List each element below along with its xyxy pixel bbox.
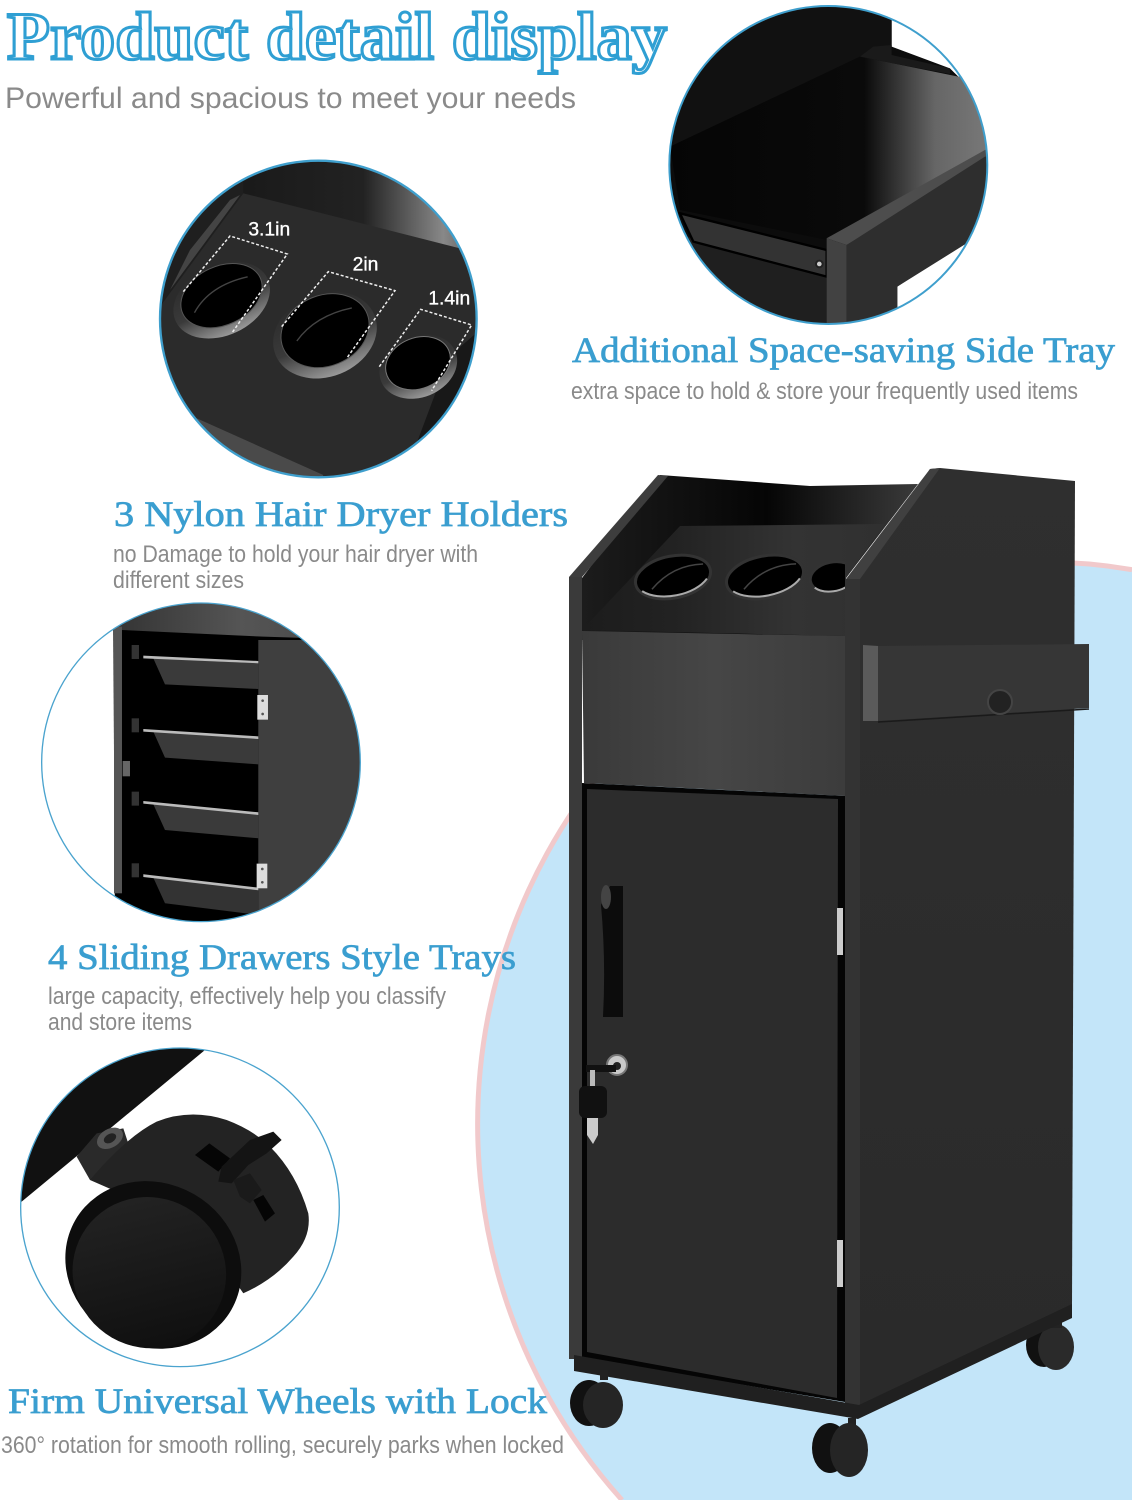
heading: wheels: Firm Universal Wheels with Lock bbox=[8, 1381, 547, 1421]
front left wheel bbox=[570, 1370, 623, 1428]
tray 4 bbox=[132, 863, 258, 915]
holder openings bbox=[634, 554, 845, 600]
cabinet bbox=[569, 468, 1089, 1477]
tray 2 bbox=[132, 718, 258, 764]
heading: side tray: Additional Space-saving Side Tray bbox=[572, 330, 1115, 370]
description: dryer holders: different sizes bbox=[113, 567, 244, 594]
wheel bbox=[65, 1181, 242, 1349]
caster body bbox=[90, 1115, 309, 1293]
door handle bbox=[601, 885, 623, 1017]
door bbox=[587, 789, 838, 1398]
description: dryer holders: no Damage to hold your hair dryer with bbox=[113, 541, 478, 568]
drawer front bbox=[582, 631, 845, 796]
icon: holder ring 3.1in bbox=[174, 263, 270, 338]
hinges bbox=[837, 908, 843, 1287]
right side panel bbox=[858, 468, 1075, 1408]
heading: drawers: 4 Sliding Drawers Style Trays bbox=[48, 937, 516, 977]
description: drawers: large capacity, effectively help you classify bbox=[48, 983, 446, 1010]
brake lever bbox=[218, 1132, 282, 1203]
heading: dryer holders: 3 Nylon Hair Dryer Holders bbox=[114, 494, 568, 534]
tray 1 bbox=[132, 645, 258, 689]
dimension labels: 3.1in bbox=[248, 219, 290, 240]
title: Product detail display bbox=[7, 0, 667, 74]
hinges bbox=[257, 695, 268, 888]
description: dryer holders bbox=[113, 541, 478, 594]
tray 3 bbox=[132, 792, 258, 838]
top interior back wall bbox=[582, 475, 918, 640]
back wheel bbox=[1026, 1318, 1074, 1370]
dimension guides bbox=[183, 236, 472, 391]
right post bbox=[845, 579, 860, 1405]
description: drawers bbox=[48, 983, 446, 1036]
description: wheels: 360° rotation for smooth rolling, securely parks when locked bbox=[1, 1432, 564, 1459]
left post bbox=[569, 577, 582, 1359]
panel: caster wheel close-up bbox=[20, 1047, 340, 1368]
description: side tray: extra space to hold & store your frequently used items bbox=[571, 378, 1078, 405]
front middle wheel bbox=[812, 1418, 868, 1477]
background blue circle bbox=[478, 562, 1132, 1500]
dimension labels: 1.4in bbox=[428, 288, 470, 309]
panel: drawer trays close-up bbox=[41, 602, 361, 922]
door lock and key bbox=[579, 1055, 627, 1144]
dimension labels bbox=[248, 219, 470, 309]
subtitle: Powerful and spacious to meet your needs bbox=[5, 82, 576, 115]
side tray bbox=[863, 644, 1089, 722]
icon: holder ring 1.4in bbox=[380, 336, 458, 399]
left slanted edge bbox=[569, 475, 668, 577]
caster stem bbox=[77, 1123, 129, 1180]
dimension labels: 2in bbox=[353, 255, 378, 276]
inner right slanted edge bbox=[846, 468, 940, 579]
description: drawers: and store items bbox=[48, 1009, 192, 1036]
holder shelf bbox=[582, 524, 885, 636]
door recess bbox=[582, 783, 845, 1402]
cabinet base bbox=[574, 1304, 1072, 1419]
panel: side tray close-up bbox=[660, 0, 1000, 333]
panel: hair dryer holders close-up bbox=[158, 160, 478, 478]
icon: holder ring 2in bbox=[274, 293, 377, 378]
